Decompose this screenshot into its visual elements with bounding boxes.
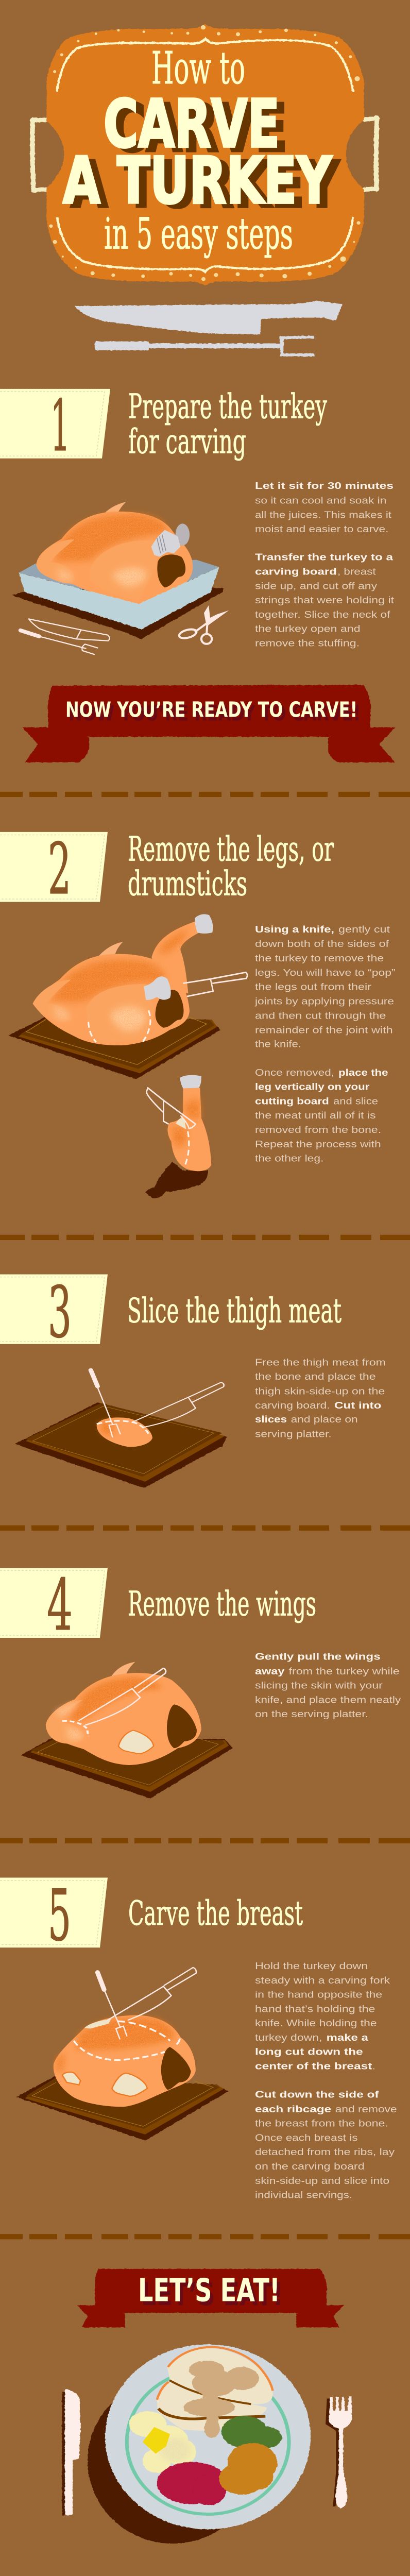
green beans — [221, 2416, 282, 2449]
step 2 text: joints by applying pressure — [254, 996, 394, 1007]
step 4 number tab — [0, 1565, 108, 1647]
step 1 text: Let it sit for 30 minutes — [255, 481, 394, 492]
step 1 text: all the juices. This makes it — [255, 510, 392, 520]
banner text — [138, 2272, 283, 2313]
step 1 heading — [128, 387, 327, 461]
pan shadow — [12, 586, 224, 639]
knife — [183, 972, 247, 996]
title: carve a turkey — [63, 86, 340, 222]
step 5 text: make a — [327, 2033, 368, 2043]
tray inner border — [57, 39, 353, 272]
step 5 text: . — [372, 2061, 375, 2072]
step 2 heading: drumsticks — [128, 864, 247, 903]
tail — [110, 1662, 135, 1679]
step 2 heading — [128, 829, 334, 903]
step 2 text — [254, 925, 396, 1164]
step 5 text: individual servings. — [255, 2190, 352, 2201]
banner ribbon — [77, 2269, 344, 2327]
step 5 text: the breast from the bone. — [255, 2119, 388, 2129]
step 2 text: place the — [338, 1067, 388, 1078]
banner ribbon — [22, 685, 396, 762]
turkey body — [37, 512, 193, 604]
step 5 number tab: 5 — [48, 1875, 71, 1957]
step 3 text: serving platter. — [255, 1429, 332, 1439]
step 1 text: so it can cool and soak in — [255, 496, 386, 506]
step 1 text: Transfer the turkey to a — [255, 552, 393, 563]
step 4 text: slicing the skin with your — [255, 1681, 383, 1691]
step 5 text: long cut down the — [255, 2047, 363, 2058]
step 3 text — [255, 1358, 386, 1439]
title tray — [32, 24, 377, 285]
step 1 number tab: 1 — [50, 385, 70, 467]
step 1 text: together. Slice the neck of — [255, 609, 390, 620]
step 2 number tab: 2 — [48, 828, 71, 910]
banner text: LET’S EAT! — [141, 2276, 283, 2313]
step 4 — [0, 1565, 401, 1799]
turkey body — [32, 954, 190, 1045]
step 2 text: Once removed, — [255, 1067, 334, 1078]
banner: let's eat — [77, 2269, 344, 2327]
tray body — [46, 24, 364, 285]
step 3 text: Free the thigh meat from — [255, 1358, 386, 1368]
turkey body — [54, 2015, 196, 2107]
carving board — [8, 1016, 220, 1079]
step 2 — [0, 828, 396, 1198]
step 4 illustration: turkey with wing cut — [21, 1662, 233, 1799]
turkey slices with gravy — [157, 2347, 273, 2438]
cavity — [167, 1704, 197, 1748]
step 2 text: the knife. — [255, 1039, 301, 1049]
step 3 — [0, 1272, 386, 1488]
mashed potatoes with butter — [129, 2411, 196, 2473]
step 2 text: the meat until all of it is — [255, 1111, 376, 1121]
pan front — [19, 567, 219, 630]
knife — [79, 1668, 166, 1725]
step 5 illustration: turkey breast cut — [16, 1968, 228, 2141]
step 1 text: the turkey open and — [255, 624, 361, 634]
step 1 text: moist and easier to carve. — [255, 524, 388, 535]
banner: now you're ready to carve — [22, 685, 396, 762]
squash — [219, 2443, 277, 2495]
step 4 text: away — [255, 1666, 285, 1677]
cavity — [161, 2047, 191, 2090]
cavity — [156, 990, 184, 1028]
step 2 number tab — [0, 828, 108, 910]
tray dots — [49, 25, 361, 281]
separated drumstick — [145, 1075, 211, 1198]
tools: scissors — [178, 605, 229, 644]
step 5 text: each ribcage — [255, 2104, 332, 2115]
step 5 text: in the hand opposite the — [255, 1990, 382, 2001]
knife — [133, 1382, 224, 1427]
step 2 text: removed from the bone. — [255, 1125, 381, 1136]
step 5 text: Cut down the side of — [255, 2090, 379, 2100]
step 3 text: thigh skin-side-up on the — [255, 1386, 385, 1397]
step 3 number tab — [0, 1272, 108, 1353]
exposed meat — [118, 1731, 153, 1754]
step 4 text: knife, and place them neatly — [255, 1695, 401, 1706]
step 2 text: down both of the sides of — [255, 939, 389, 950]
step 3 text: carving board. — [255, 1401, 330, 1411]
step 5 text: skin-side-up and slice into — [255, 2176, 389, 2187]
step 4 text: Gently pull the wings — [255, 1652, 381, 1663]
step 5 number tab — [0, 1875, 108, 1957]
step 4 text — [255, 1652, 401, 1720]
step 5 text: detached from the ribs, lay — [255, 2147, 395, 2158]
tray illustration — [32, 24, 377, 285]
tail — [101, 502, 126, 516]
step 4 number tab: 4 — [47, 1565, 73, 1647]
thigh — [97, 1417, 152, 1447]
step 1 heading: for carving — [128, 422, 246, 461]
step 1 text: side up, and cut off any — [255, 581, 377, 591]
step 3 illustration: thigh on board — [15, 1370, 227, 1488]
step 1 text: carving board — [255, 567, 337, 577]
step 2 text: remainder of the joint with — [255, 1025, 393, 1036]
plate — [105, 2344, 311, 2529]
leg bone — [144, 976, 171, 1000]
step 2 text: the turkey to remove the — [255, 954, 384, 964]
step 1 — [0, 385, 395, 654]
step 5 text — [255, 1961, 397, 2201]
step 1 text — [255, 481, 395, 649]
leg bone wrap — [151, 523, 190, 556]
step 5 text: on the carving board — [255, 2161, 365, 2172]
step 3 text: slices — [255, 1415, 287, 1425]
step 2 text: and then cut through the — [255, 1011, 386, 1021]
turkey body — [46, 1673, 201, 1765]
fork — [97, 1972, 127, 2039]
tail — [99, 942, 123, 956]
step 5 text: Hold the turkey down — [255, 1961, 368, 1972]
step 3 text: and place on — [291, 1415, 358, 1425]
step 2 illustration: turkey with leg on board — [8, 914, 247, 1198]
raised leg — [151, 914, 213, 993]
step 2 text: and slice — [333, 1096, 378, 1107]
step 2 text: Using a knife, — [255, 925, 334, 935]
step 3 text: Cut into — [334, 1401, 382, 1411]
cut line — [62, 1721, 89, 1736]
cranberries — [157, 2462, 228, 2505]
step 5 — [0, 1875, 397, 2201]
step 1 text: strings that were holding it — [255, 596, 395, 606]
step 5 text: knife. While holding the — [255, 2019, 377, 2029]
step 5 text: and remove — [335, 2104, 397, 2115]
knife — [108, 1968, 196, 2020]
cut lines — [74, 2021, 180, 2060]
banner text: LET’S EAT! — [138, 2272, 280, 2309]
step 4 text: on the serving platter. — [255, 1709, 368, 1720]
carving board — [15, 1402, 227, 1488]
icon: chef knife and fork — [75, 300, 343, 357]
step 2 text: legs. You will have to “pop” — [255, 968, 396, 978]
step 2 text: Repeat the process with — [255, 1139, 381, 1150]
step 5 text: hand that’s holding the — [255, 2004, 375, 2015]
step 5 text: Once each breast is — [255, 2133, 357, 2143]
step 3 number tab: 3 — [48, 1272, 72, 1353]
step 2 text: the legs out from their — [255, 982, 372, 993]
step 2 text: cutting board — [255, 1096, 329, 1107]
fork — [326, 2396, 352, 2509]
pan interior — [19, 560, 219, 604]
cut lines — [89, 1010, 150, 1042]
plate rim ring — [127, 2369, 289, 2514]
cut line — [97, 1421, 149, 1436]
table setting — [62, 2344, 352, 2544]
step 5 text: turkey down, — [255, 2033, 322, 2043]
step 1 text: remove the stuffing. — [255, 638, 360, 649]
tray handles — [32, 117, 377, 193]
title: carve a turkey: CARVE — [104, 86, 280, 162]
knife — [62, 2389, 80, 2515]
carving board — [21, 1736, 233, 1799]
step 2 text: the other leg. — [255, 1154, 323, 1164]
step 2 text: leg vertically on your — [255, 1082, 370, 1092]
title: carve a turkey: CARVE — [111, 90, 287, 167]
fork — [91, 1370, 121, 1437]
step 2 text: gently cut — [338, 925, 390, 935]
exposed meat — [62, 2019, 147, 2096]
step 5 text: center of the breast — [255, 2061, 372, 2072]
carving board — [16, 2076, 228, 2141]
step 1 text: , breast — [337, 567, 376, 577]
plate shadow — [88, 2378, 258, 2544]
step 1 number tab — [0, 385, 110, 467]
step 1 illustration: turkey in roasting pan — [12, 502, 229, 654]
step 5 text: steady with a carving fork — [255, 1976, 390, 1986]
step 3 text: the bone and place the — [255, 1372, 376, 1382]
tools: knife and fork — [21, 619, 110, 654]
title: how to: How to — [151, 43, 245, 94]
cavity — [157, 554, 185, 587]
step 4 text: from the turkey while — [288, 1666, 400, 1677]
